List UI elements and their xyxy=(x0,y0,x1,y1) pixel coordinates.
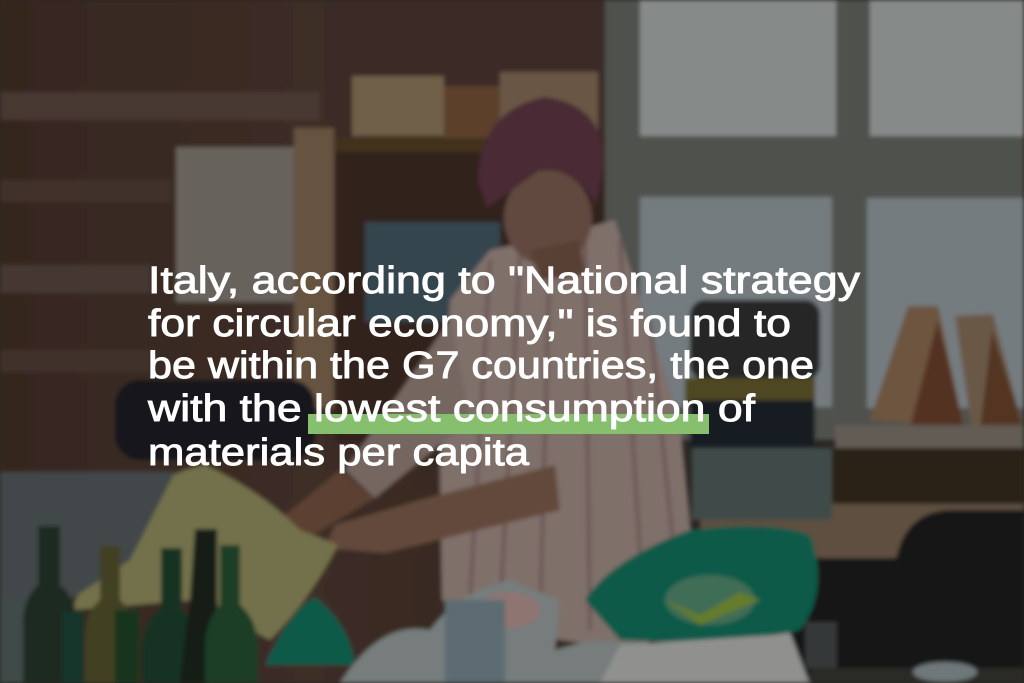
plastic sheet xyxy=(0,465,338,683)
brick wall xyxy=(0,0,620,683)
window xyxy=(605,0,1024,440)
wine bottles xyxy=(23,526,258,683)
clothes pile and basket xyxy=(115,300,832,520)
headline text: Italy, according to "National strategy xyxy=(148,260,860,302)
headline text xyxy=(147,260,860,474)
highlight: lowest consumption xyxy=(308,414,709,434)
plastic waste pile xyxy=(340,580,1024,683)
headline text: with the lowest consumption of xyxy=(147,388,756,430)
person xyxy=(245,97,698,650)
headline text: be within the G7 countries, the one xyxy=(148,345,814,387)
headline text: for circular economy," is found to xyxy=(148,303,791,345)
headline text: materials per capita xyxy=(148,432,530,474)
wooden shelf and boxes xyxy=(335,72,605,442)
wooden cones on sill xyxy=(835,306,1024,449)
back table xyxy=(700,448,1024,683)
green bag xyxy=(265,526,818,665)
canvas board and plank xyxy=(176,128,334,408)
